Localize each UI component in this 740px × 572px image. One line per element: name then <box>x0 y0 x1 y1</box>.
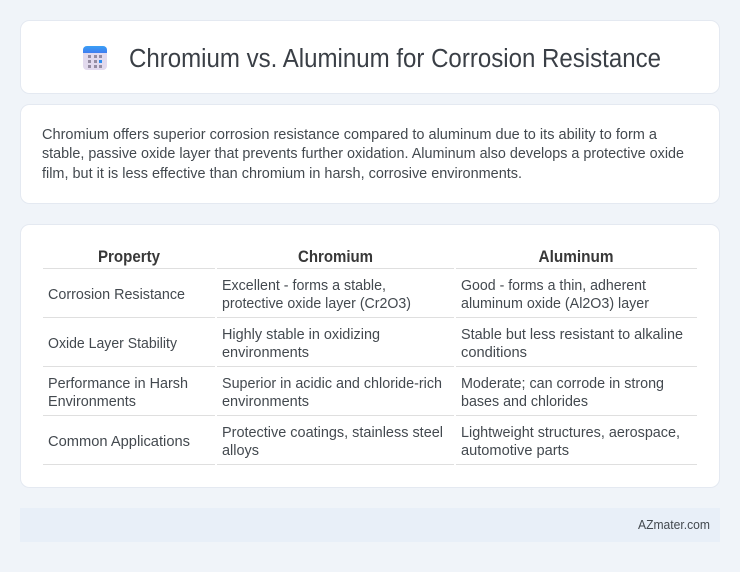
table header: Property <box>98 248 161 266</box>
table header: Chromium <box>298 248 373 266</box>
panel: intro <box>20 104 720 204</box>
intro text: Chromium offers superior corrosion resistance compared to aluminum due to its ability to form a <box>42 127 658 143</box>
footer credit: AZmater.com <box>638 518 710 532</box>
intro text: stable, passive oxide layer that prevents further oxidation. Aluminum also develops a protective oxide <box>42 146 684 162</box>
row: common applications <box>48 425 680 459</box>
row: performance in harsh environments: Environments <box>48 394 136 410</box>
row: corrosion resistance: Corrosion Resistance <box>48 287 185 303</box>
row: common applications: Common Applications <box>48 434 190 450</box>
row: performance in harsh environments: Performance in Harsh <box>48 376 188 392</box>
title: Chromium vs. Aluminum for Corrosion Resistance <box>129 45 661 73</box>
row: performance in harsh environments <box>48 376 664 410</box>
footer <box>20 508 720 542</box>
row: oxide layer stability: environments <box>222 345 309 361</box>
table header <box>98 248 614 266</box>
row: corrosion resistance <box>48 278 649 312</box>
row: corrosion resistance: Good - forms a thin, adherent <box>461 278 646 294</box>
panel: header <box>20 20 720 94</box>
row: performance in harsh environments: environments <box>222 394 309 410</box>
row: common applications: Protective coatings, stainless steel <box>222 425 443 441</box>
row: oxide layer stability <box>48 327 683 361</box>
row: common applications: alloys <box>222 443 259 459</box>
row: oxide layer stability: Oxide Layer Stability <box>48 336 178 352</box>
icon: calendar <box>83 46 107 70</box>
row: corrosion resistance: protective oxide layer (Cr2O3) <box>222 296 411 312</box>
row: performance in harsh environments: bases and chlorides <box>461 394 588 410</box>
row: oxide layer stability: conditions <box>461 345 527 361</box>
row: oxide layer stability: Highly stable in oxidizing <box>222 327 380 343</box>
table header: Aluminum <box>538 248 614 266</box>
row: corrosion resistance: aluminum oxide (Al2O3) layer <box>461 296 649 312</box>
row: performance in harsh environments: Superior in acidic and chloride-rich <box>222 376 442 392</box>
intro text: film, but it is less effective than chromium in harsh, corrosive environments. <box>42 166 522 182</box>
intro text <box>42 127 684 182</box>
panel: comparison table <box>20 224 720 488</box>
row: oxide layer stability: Stable but less resistant to alkaline <box>461 327 683 343</box>
row: corrosion resistance: Excellent - forms a stable, <box>222 278 386 294</box>
row: common applications: automotive parts <box>461 443 569 459</box>
row: performance in harsh environments: Moderate; can corrode in strong <box>461 376 664 392</box>
row: common applications: Lightweight structures, aerospace, <box>461 425 680 441</box>
